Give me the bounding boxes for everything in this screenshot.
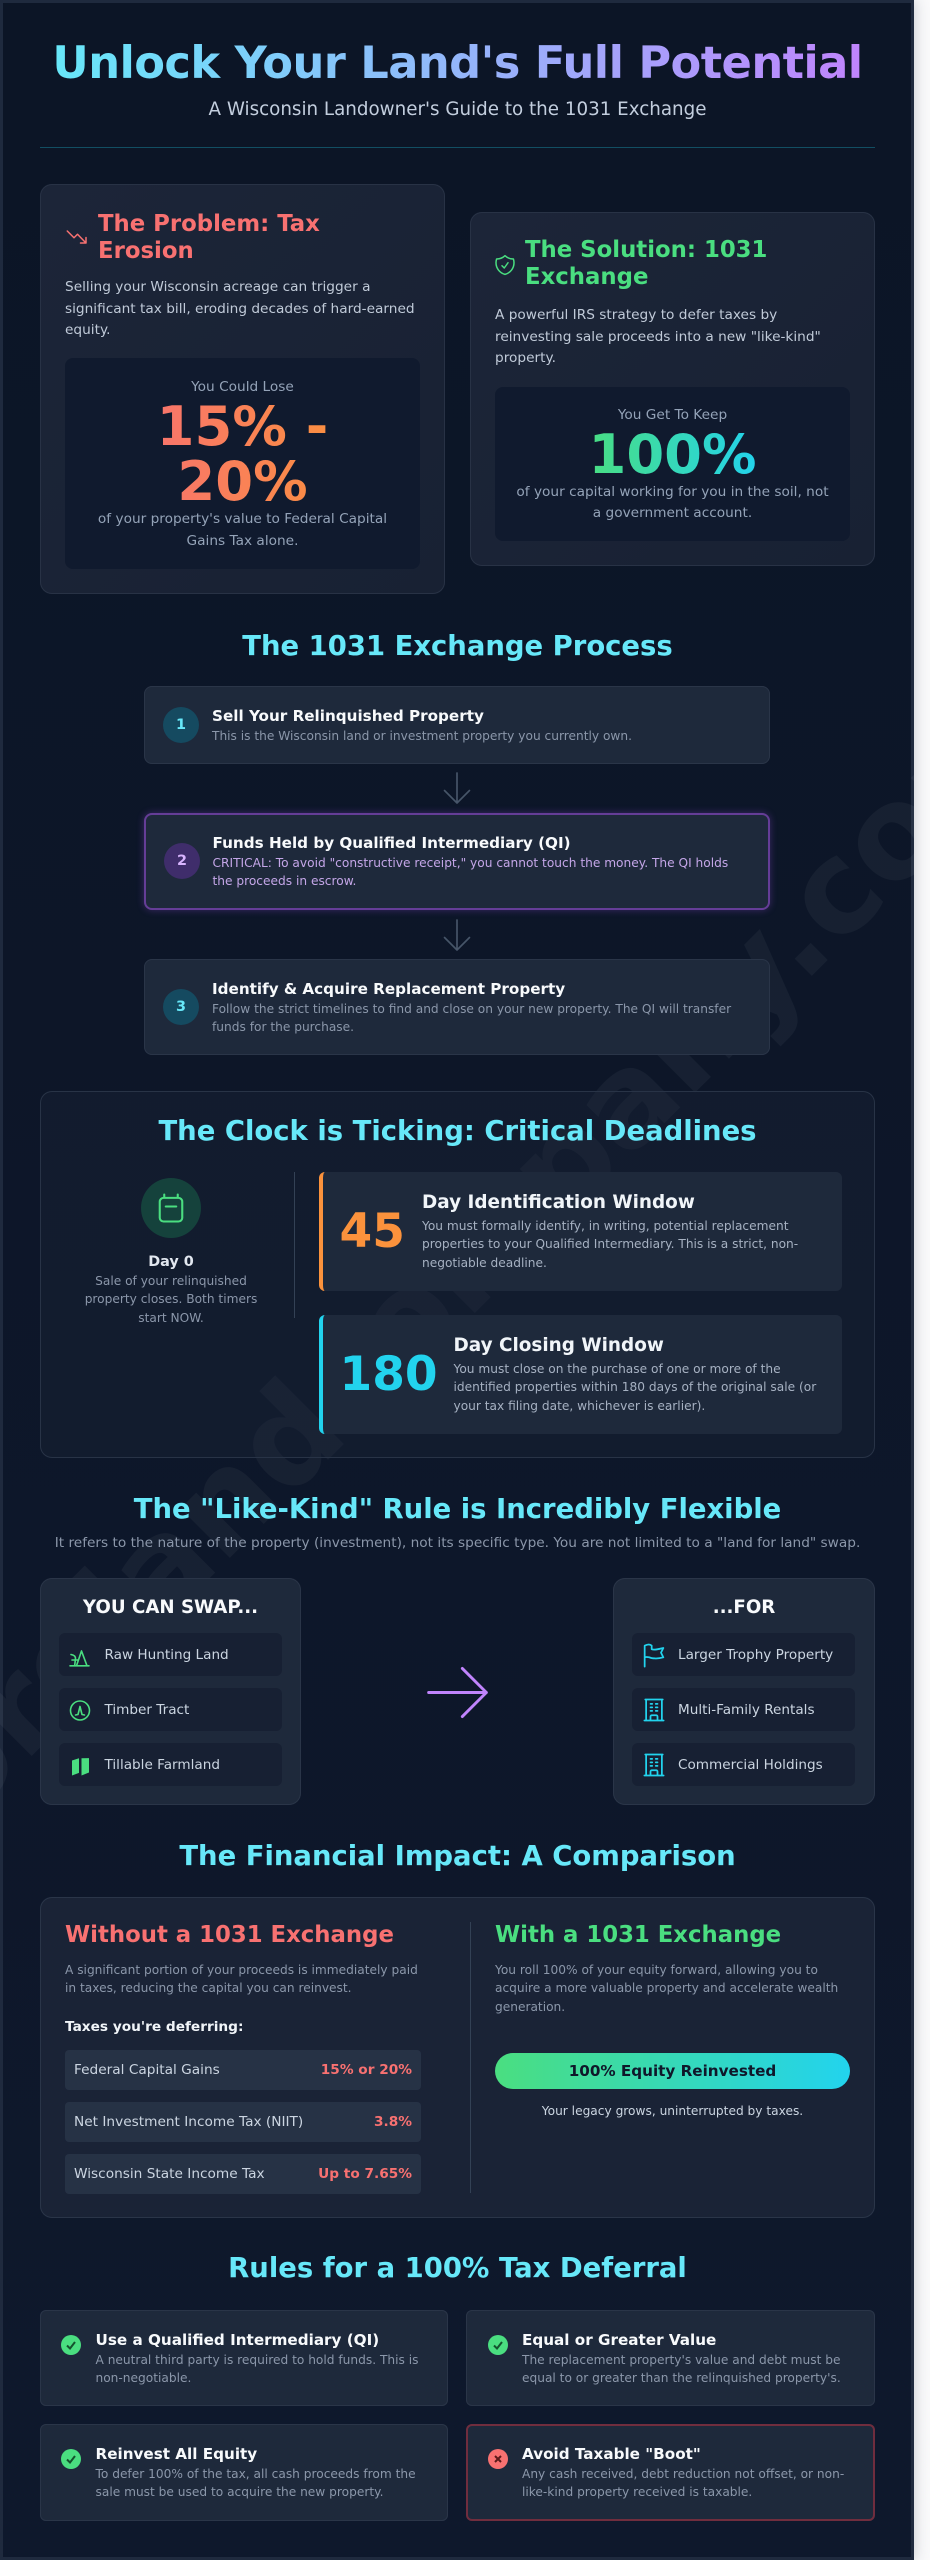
- rule text: sale must be used to acquire the new property.: [96, 2485, 383, 2499]
- rule: qualified intermediary: [40, 2310, 448, 2406]
- stat value: 15% -: [157, 395, 328, 458]
- solution description: reinvesting sale proceeds into a new "like-kind": [495, 328, 821, 344]
- icon: hunting land: [69, 1650, 90, 1667]
- icon: x: [488, 2449, 508, 2469]
- tax row: wisconsin: Up to 7.65%: [318, 2166, 412, 2182]
- rule text: [522, 2331, 841, 2385]
- tax row: federal: Federal Capital Gains: [74, 2062, 220, 2078]
- step 1 text: [212, 707, 632, 743]
- stat caption: of your property's value to Federal Capital: [98, 511, 387, 527]
- arrow down: [444, 772, 470, 804]
- header divider: [40, 147, 875, 148]
- stat caption: [516, 484, 829, 521]
- for heading: ...FOR: [713, 1597, 775, 1618]
- step number 1: 1: [176, 717, 186, 733]
- step number 2: 2: [177, 853, 187, 869]
- label: Timber Tract: [104, 1702, 189, 1718]
- step 1 text: This is the Wisconsin land or investment property you currently own.: [212, 729, 632, 743]
- icon: calendar: [140, 1178, 200, 1238]
- stat value: [132, 399, 353, 509]
- 180 day description: your tax filing date, whichever is earlier).: [454, 1399, 705, 1413]
- step 2 text: the proceeds in escrow.: [212, 874, 356, 888]
- panel: you can swap: [40, 1578, 301, 1805]
- heading: the solution: Exchange: [525, 264, 648, 290]
- arrow: swap to: [427, 1666, 488, 1718]
- item: multi-family rentals: [632, 1688, 855, 1731]
- number 45: 45: [340, 1204, 405, 1258]
- item: larger trophy property: [632, 1633, 855, 1676]
- icon: timber: [70, 1700, 90, 1721]
- problem description: Selling your Wisconsin acreage can trigger a: [65, 279, 370, 295]
- rule text: A neutral third party is required to hold funds. This is: [96, 2353, 418, 2367]
- panel: for: [613, 1578, 875, 1805]
- 180 day description: You must close on the purchase of one or more of the: [454, 1362, 781, 1376]
- stat box: you get to keep: [495, 386, 850, 541]
- tax row: niit: 3.8%: [374, 2114, 412, 2130]
- problem description: [65, 279, 415, 338]
- stat caption: of your capital working for you in the soil, not: [516, 484, 829, 500]
- stat label: You Get To Keep: [618, 407, 727, 423]
- heading: the problem: The Problem: Tax: [98, 210, 320, 236]
- rule text: like-kind property received is taxable.: [522, 2485, 752, 2499]
- tax row: niit: [65, 2102, 421, 2142]
- deadline card: 180 day: [318, 1315, 842, 1434]
- without description: [65, 1963, 418, 1995]
- icon: map: [72, 1758, 89, 1776]
- timeline divider: [294, 1172, 295, 1318]
- step 3 text: funds for the purchase.: [212, 1020, 354, 1034]
- heading: the problem: Erosion: [98, 238, 194, 264]
- day 0 description: start NOW.: [138, 1311, 204, 1325]
- rule text: To defer 100% of the tax, all cash proceeds from the: [96, 2467, 416, 2481]
- with description: You roll 100% of your equity forward, allowing you to: [495, 1963, 818, 1977]
- rule text: [96, 2331, 418, 2385]
- tax row: wisconsin: Wisconsin State Income Tax: [74, 2166, 265, 2182]
- stat caption: [98, 511, 387, 548]
- swap heading: YOU CAN SWAP...: [83, 1597, 258, 1618]
- stat box: you could lose: [65, 358, 420, 569]
- without description: in taxes, reducing the capital you can reinvest.: [65, 1981, 352, 1995]
- stat value: 100%: [588, 422, 757, 486]
- icon: building: [644, 1754, 664, 1776]
- like-kind subtitle: It refers to the nature of the property (investment), not its specific type. You are not limited to a "land for land" swap.: [55, 1535, 860, 1551]
- heading: financial impact: The Financial Impact: A Comparison: [179, 1841, 736, 1872]
- title: Unlock Your Land's Full Potential: [52, 36, 863, 88]
- panel: the problem: [40, 184, 445, 594]
- with description: [495, 1963, 838, 2014]
- 45 day description: [422, 1219, 798, 1270]
- label: Tillable Farmland: [104, 1757, 220, 1773]
- day 0 description: property closes. Both timers: [85, 1292, 257, 1306]
- rule text: Avoid Taxable "Boot": [522, 2445, 701, 2463]
- day 0 description: [85, 1274, 257, 1325]
- 45 day description: You must formally identify, in writing, potential replacement: [422, 1219, 788, 1233]
- legacy caption: Your legacy grows, uninterrupted by taxes.: [542, 2104, 803, 2118]
- rule text: [522, 2445, 844, 2499]
- solution description: property.: [495, 350, 556, 366]
- icon: check: [488, 2335, 508, 2355]
- panel: deadlines: [40, 1091, 875, 1458]
- stat caption: Gains Tax alone.: [187, 532, 298, 548]
- icon: building: [644, 1698, 664, 1722]
- with description: generation.: [495, 2000, 565, 2014]
- heading: the solution: [525, 237, 767, 290]
- without description: A significant portion of your proceeds is immediately paid: [65, 1963, 418, 1977]
- step number 3: [163, 989, 199, 1025]
- problem description: equity.: [65, 322, 110, 338]
- panel: financial comparison: [40, 1897, 875, 2218]
- heading: the problem: [98, 210, 320, 264]
- tax row: federal: [65, 2050, 421, 2090]
- step 2 text: [212, 834, 728, 888]
- heading: with exchange: With a 1031 Exchange: [495, 1922, 781, 1948]
- equity bar: 100% Equity Reinvested: [569, 2062, 776, 2080]
- rule text: Use a Qualified Intermediary (QI): [96, 2331, 379, 2349]
- 180 day description: identified properties within 180 days of the original sale (or: [454, 1380, 816, 1394]
- deadline card: 45 day: [318, 1172, 842, 1291]
- icon: trending down: [66, 230, 87, 244]
- item: timber tract: [59, 1688, 282, 1731]
- rule text: The replacement property's value and debt must be: [522, 2353, 840, 2367]
- label: Multi-Family Rentals: [678, 1702, 815, 1718]
- tax row: federal: 15% or 20%: [321, 2062, 412, 2078]
- step 3 text: Follow the strict timelines to find and close on your new property. The QI will transfer: [212, 1002, 731, 1016]
- rule text: equal to or greater than the relinquished property's.: [522, 2371, 841, 2385]
- step 2 text: Funds Held by Qualified Intermediary (QI): [212, 834, 571, 852]
- rule text: [95, 2445, 416, 2499]
- subtitle: A Wisconsin Landowner's Guide to the 1031 Exchange: [208, 99, 706, 120]
- item: tillable farmland: [59, 1743, 282, 1786]
- number 180: 180: [340, 1346, 438, 1402]
- rule text: Equal or Greater Value: [522, 2331, 716, 2349]
- column divider: [470, 1922, 471, 2193]
- step number 2: [164, 843, 200, 879]
- heading: exchange process: The 1031 Exchange Process: [242, 631, 673, 662]
- heading: without exchange: Without a 1031 Exchange: [65, 1922, 394, 1948]
- 45 day description: properties to your Qualified Intermediary. This is a strict, non-: [422, 1237, 798, 1251]
- rule text: non-negotiable.: [96, 2371, 191, 2385]
- step 3 text: [212, 980, 732, 1034]
- step 2 text: CRITICAL: To avoid "constructive receipt," you cannot touch the money. The QI holds: [212, 856, 728, 870]
- step 2: [144, 813, 770, 910]
- day 0 label: Day 0: [148, 1254, 194, 1270]
- step number 3: 3: [176, 999, 186, 1015]
- stat caption: a government account.: [593, 505, 752, 521]
- 180 day title: Day Closing Window: [454, 1335, 664, 1356]
- equity bar: [495, 2053, 850, 2089]
- label: Raw Hunting Land: [104, 1647, 229, 1663]
- icon: shield check: [495, 254, 515, 276]
- 180 day description: [454, 1362, 816, 1413]
- icon: flag: [644, 1644, 664, 1668]
- rule: equal or greater value: [466, 2310, 875, 2406]
- label: Commercial Holdings: [678, 1757, 823, 1773]
- step 3: [144, 959, 770, 1055]
- label: Larger Trophy Property: [678, 1647, 833, 1663]
- icon: check: [61, 2335, 81, 2355]
- heading: like-kind: The "Like-Kind" Rule is Incredibly Flexible: [134, 1494, 781, 1525]
- rule text: Any cash received, debt reduction not offset, or non-: [522, 2467, 844, 2481]
- 45 day title: Day Identification Window: [422, 1192, 695, 1213]
- heading: rules: Rules for a 100% Tax Deferral: [228, 2253, 687, 2284]
- step 3 text: Identify & Acquire Replacement Property: [212, 980, 565, 998]
- with description: acquire a more valuable property and accelerate wealth: [495, 1981, 838, 1995]
- stat value: 20%: [177, 450, 308, 513]
- item: raw hunting land: [59, 1633, 282, 1676]
- solution description: [495, 307, 821, 366]
- tax row: wisconsin: [65, 2154, 421, 2194]
- step number 1: [163, 707, 199, 743]
- rule: reinvest all equity: [40, 2424, 448, 2521]
- stat label: You Could Lose: [191, 379, 294, 395]
- icon: check: [61, 2449, 81, 2469]
- step 1 text: Sell Your Relinquished Property: [212, 707, 484, 725]
- day 0 description: Sale of your relinquished: [95, 1274, 247, 1288]
- rule text: Reinvest All Equity: [96, 2445, 257, 2463]
- arrow down: [444, 919, 470, 951]
- step 1: [144, 686, 770, 764]
- tax row: niit: Net Investment Income Tax (NIIT): [74, 2114, 303, 2130]
- solution description: A powerful IRS strategy to defer taxes by: [495, 307, 777, 323]
- 45 day description: negotiable deadline.: [422, 1256, 547, 1270]
- panel: the solution: [470, 212, 875, 566]
- taxes label: Taxes you're deferring:: [65, 2019, 243, 2035]
- problem description: significant tax bill, eroding decades of hard-earned: [65, 300, 415, 316]
- rule: avoid boot: [466, 2424, 875, 2521]
- heading: deadlines: The Clock is Ticking: Critical Deadlines: [158, 1116, 757, 1147]
- heading: the solution: The Solution: 1031: [525, 237, 767, 263]
- item: commercial holdings: [632, 1743, 855, 1786]
